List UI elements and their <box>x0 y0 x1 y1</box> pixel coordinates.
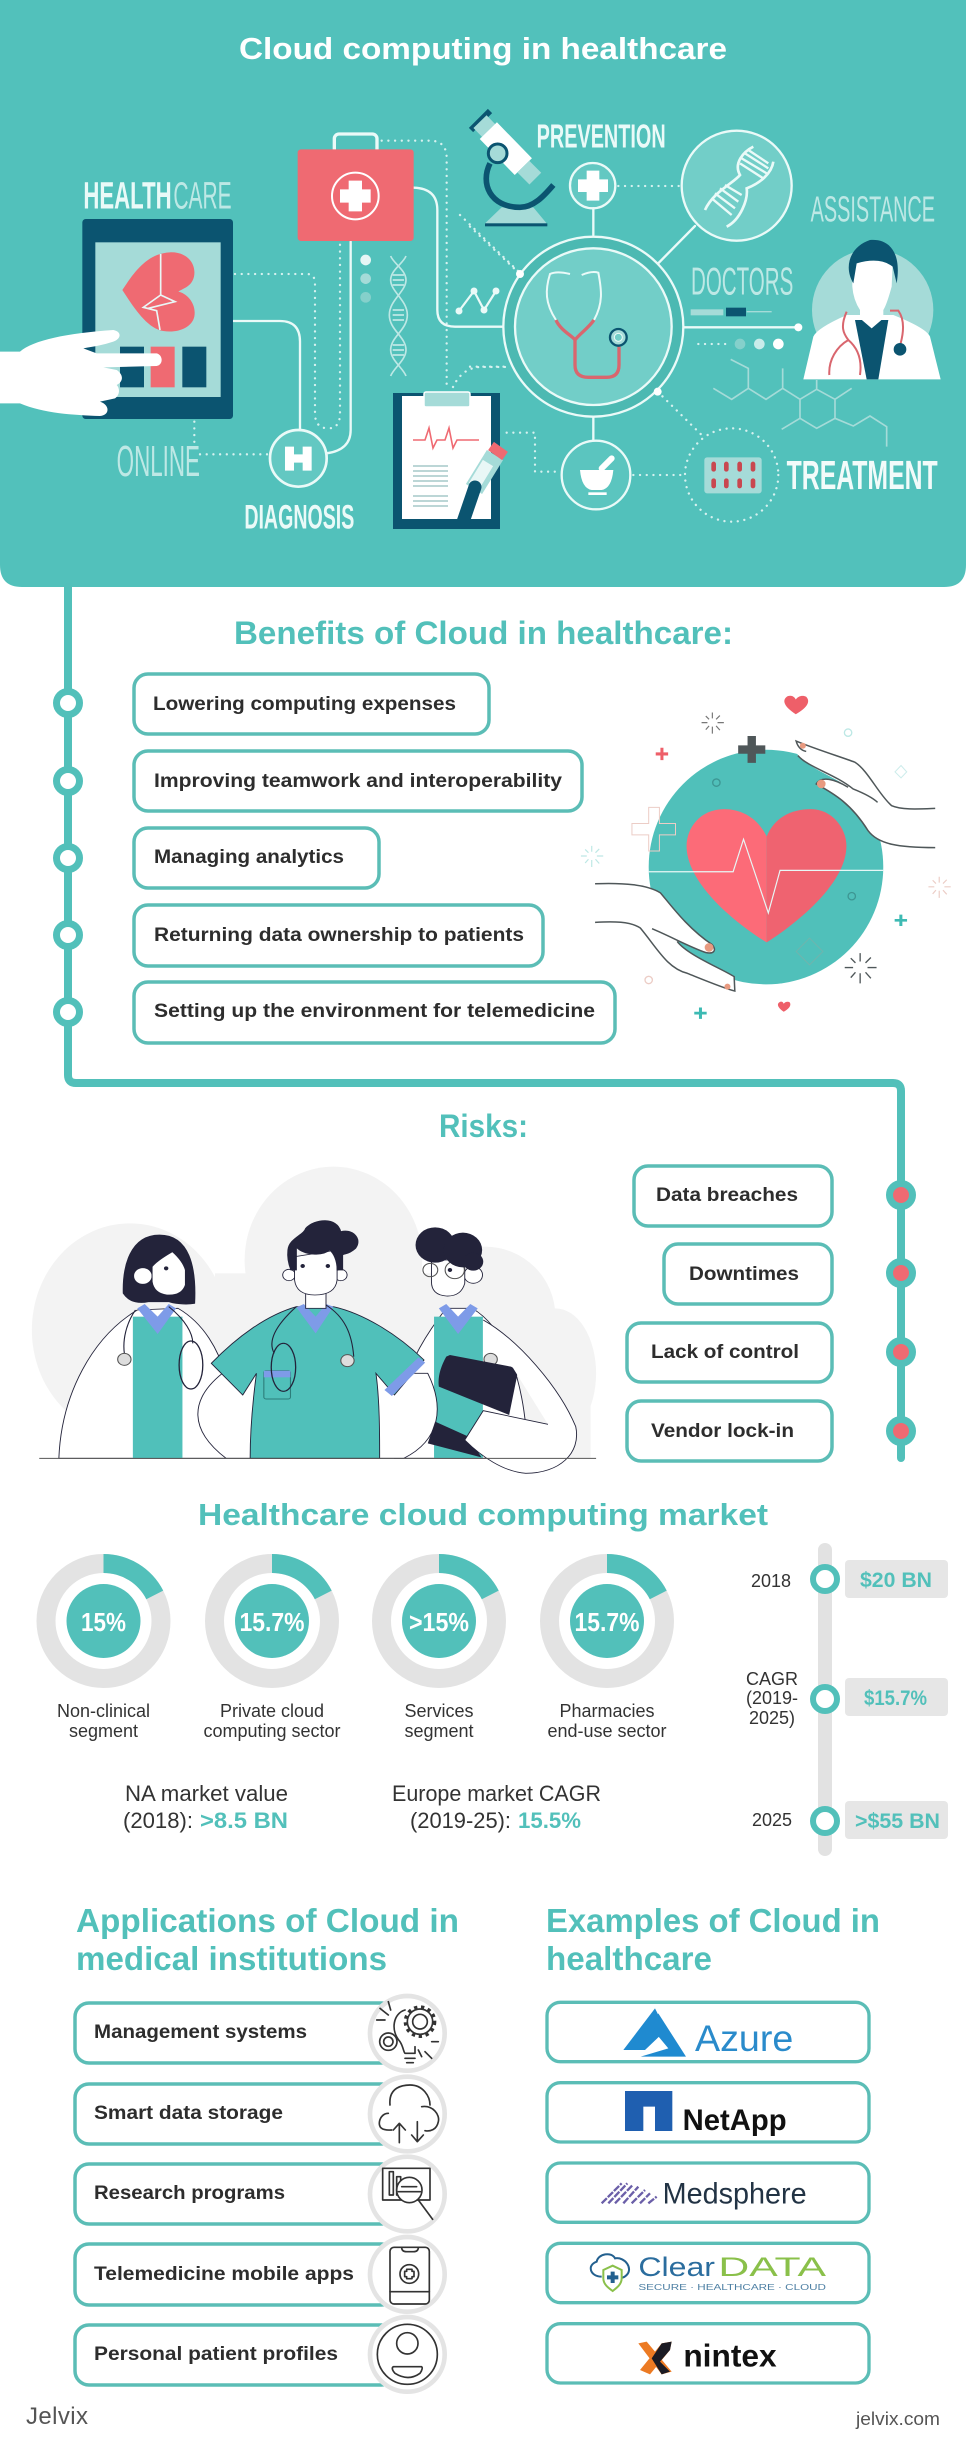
center doctor <box>198 1221 437 1458</box>
risk 1: Data breaches <box>656 1185 798 1206</box>
examples list <box>547 2002 869 2383</box>
icon: hospital circle <box>270 430 327 487</box>
examples heading: Examples of Cloud in <box>546 1902 880 1939</box>
benefit list <box>56 674 615 1043</box>
timeline 2025: >$55 BN <box>855 1810 940 1833</box>
stat: Europe market CAGR: 15.5% <box>518 1808 581 1833</box>
market value timeline <box>746 1543 948 1856</box>
icon: microscope <box>471 111 553 226</box>
icon: clipboard with test tube <box>393 392 505 529</box>
icon: molecule <box>713 359 887 447</box>
timeline 2018: 2018 <box>751 1571 791 1591</box>
icon: first aid kit <box>298 134 414 241</box>
footer url: jelvix.com <box>855 2409 940 2429</box>
dotted diagonals <box>453 215 520 387</box>
examples heading: healthcare <box>546 1940 712 1977</box>
app 1: Management systems <box>94 2022 307 2043</box>
logo: NetApp <box>547 2083 869 2142</box>
donut: non-clinical: Non-clinical <box>57 1701 150 1721</box>
timeline CAGR: (2019- <box>746 1688 798 1708</box>
stat: NA market value: (2018): <box>123 1808 193 1833</box>
logo: ClearDATA: Clear <box>638 2252 715 2282</box>
donut: private cloud: Private cloud <box>220 1701 324 1721</box>
risk 4 <box>627 1401 912 1461</box>
icon: bulb gears <box>370 1996 445 2071</box>
stat: NA market value <box>123 1781 288 1833</box>
market heading: Healthcare cloud computing market <box>198 1497 768 1532</box>
stat: Europe market CAGR: Europe market CAGR <box>392 1781 601 1806</box>
applications heading <box>76 1902 459 1977</box>
icon: research magnifier <box>370 2157 445 2231</box>
app 4: Telemedicine mobile apps <box>94 2264 354 2285</box>
timeline CAGR: CAGR <box>746 1669 798 1689</box>
icon: syringe <box>691 308 772 316</box>
risk 1 <box>634 1166 912 1226</box>
timeline 2025 <box>752 1801 948 1839</box>
icon: user profile <box>370 2317 445 2392</box>
app 5: Personal patient profiles <box>94 2344 338 2365</box>
label: prevention: PREVENTION <box>537 119 666 156</box>
benefit 1: Lowering computing expenses <box>153 694 456 715</box>
right doctor <box>394 1227 528 1458</box>
logo: Medsphere: Medsphere <box>663 2177 807 2210</box>
risk 3: Lack of control <box>651 1342 799 1363</box>
benefit 2 <box>56 751 582 811</box>
app 2: Smart data storage <box>94 2103 283 2124</box>
risk 4: Vendor lock-in <box>651 1421 794 1442</box>
donut: non-clinical: segment <box>69 1721 138 1741</box>
donut: pharmacies: 15.7% <box>574 1607 640 1637</box>
donut: private cloud: 15.7% <box>240 1607 304 1637</box>
risk 2 <box>664 1244 912 1304</box>
timeline CAGR: 2025) <box>749 1708 795 1728</box>
dots row <box>735 323 802 349</box>
risk 2: Downtimes <box>689 1264 799 1285</box>
icon: doctor <box>803 240 941 379</box>
timeline 2018: $20 BN <box>860 1569 932 1592</box>
benefit 3: Managing analytics <box>154 847 344 868</box>
stat: Europe market CAGR <box>392 1781 601 1833</box>
logo: Azure: Azure <box>695 2017 793 2059</box>
dots <box>360 255 371 303</box>
hero illustration right half <box>470 111 941 522</box>
logo: NetApp: NetApp <box>683 2104 787 2137</box>
app 3 <box>75 2164 395 2224</box>
illustration: medical team <box>32 1167 596 1473</box>
icon: dna circle <box>682 131 792 241</box>
label: healthcare: HEALTH <box>83 175 172 217</box>
applications heading: medical institutions <box>76 1940 387 1977</box>
icon: cloud transfer <box>370 2077 445 2151</box>
stat: NA market value: NA market value <box>125 1781 288 1806</box>
icon: mobile medical app <box>370 2237 445 2312</box>
risk 3 <box>627 1323 912 1382</box>
benefit 3 <box>56 828 379 888</box>
logo: nintex: nintex <box>683 2338 777 2374</box>
hero panel <box>0 0 966 587</box>
donut: non-clinical: 15% <box>81 1607 126 1637</box>
risk list <box>627 1166 912 1461</box>
app 4 <box>75 2244 395 2305</box>
benefit 2: Improving teamwork and interoperability <box>154 771 562 792</box>
donut: services: >15% <box>409 1607 469 1637</box>
label: healthcare: CARE <box>173 175 232 217</box>
logo: nintex <box>547 2324 869 2383</box>
icon: central stethoscope circle <box>503 237 683 417</box>
footer brand: Jelvix <box>26 2403 88 2430</box>
donut: private cloud: computing sector <box>203 1721 341 1741</box>
benefit 5 <box>56 982 615 1043</box>
timeline 2018 <box>751 1560 948 1598</box>
background cloud <box>32 1167 596 1458</box>
logo: Azure <box>547 2002 869 2062</box>
connectors right <box>470 186 798 475</box>
stat: NA market value: >8.5 BN <box>200 1808 288 1833</box>
icon: pointing hand <box>0 330 162 416</box>
connectors left <box>194 141 503 454</box>
hero illustration left half <box>0 134 503 536</box>
app 5 <box>75 2325 395 2385</box>
ground line <box>39 1457 596 1460</box>
logo: Medsphere <box>547 2163 869 2222</box>
label: diagnosis: DIAGNOSIS <box>244 498 354 536</box>
donut: non-clinical <box>46 1554 163 1741</box>
label: online: ONLINE <box>117 438 200 486</box>
risks heading: Risks: <box>439 1108 528 1144</box>
icon: pill pack <box>685 428 778 522</box>
icon: plus circle <box>570 163 615 208</box>
label: doctors: DOCTORS <box>691 260 793 303</box>
timeline CAGR: $15.7% <box>864 1687 927 1710</box>
application icons <box>370 1996 445 2392</box>
examples heading <box>546 1902 880 1977</box>
benefit 1 <box>56 674 489 734</box>
donut: private cloud <box>203 1554 341 1741</box>
benefits heading: Benefits of Cloud in healthcare: <box>234 615 733 651</box>
title: Cloud computing in healthcare <box>239 31 727 66</box>
icon: dna strand <box>389 256 407 376</box>
benefit 5: Setting up the environment for telemedicine <box>154 1001 595 1022</box>
logo: ClearDATA: DATA <box>718 2252 826 2282</box>
app 2 <box>75 2084 395 2144</box>
tablet and arm <box>428 1320 577 1473</box>
icon: mortar circle <box>562 441 630 509</box>
icon: tablet with heart <box>82 219 233 419</box>
timeline 2025: 2025 <box>752 1810 792 1830</box>
benefit 4: Returning data ownership to patients <box>154 925 524 946</box>
stat: Europe market CAGR: (2019-25): <box>410 1808 511 1833</box>
timeline connector <box>68 587 901 1458</box>
heart illustration <box>581 696 951 1019</box>
donut: pharmacies: Pharmacies <box>559 1701 655 1721</box>
logo: ClearDATA: SECURE · HEALTHCARE · CLOUD <box>638 2282 826 2292</box>
donut: services: Services <box>404 1701 474 1721</box>
app 1 <box>75 2003 395 2063</box>
donut: pharmacies <box>547 1554 667 1741</box>
donut: services: segment <box>404 1721 474 1741</box>
left doctor <box>59 1235 226 1458</box>
logo: ClearDATA <box>547 2243 869 2303</box>
benefit 4 <box>56 905 543 966</box>
icon: zigzag chart <box>456 288 500 314</box>
donut: services <box>382 1554 499 1741</box>
applications heading: Applications of Cloud in <box>76 1902 459 1939</box>
timeline CAGR <box>746 1669 948 1728</box>
donut: pharmacies: end-use sector <box>547 1721 667 1741</box>
app 3: Research programs <box>94 2183 285 2204</box>
application list boxes <box>75 2003 395 2385</box>
